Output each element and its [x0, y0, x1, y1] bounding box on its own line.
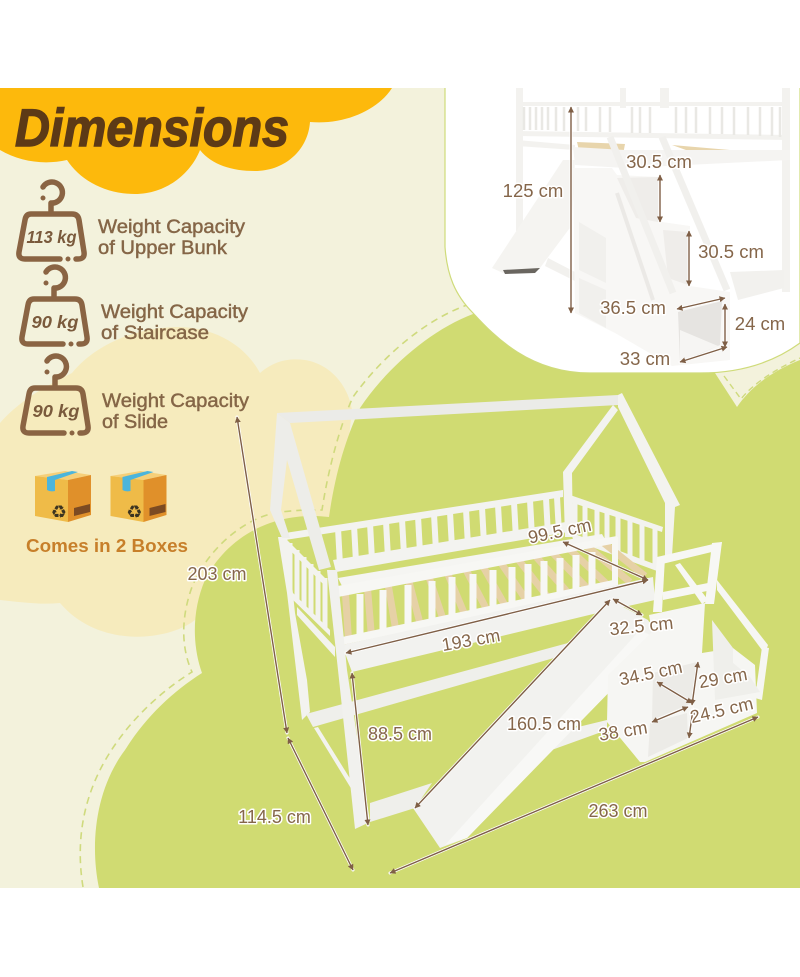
dimension labels: main bed: 88.5 cm [368, 724, 432, 744]
dimension labels: main bed: 203 cm [187, 564, 247, 584]
background: cream sliver under inset [700, 343, 800, 407]
dimension labels: inset: 30.5 cm [698, 241, 764, 262]
stair handrails [610, 137, 673, 293]
dimension labels: inset: 33 cm [620, 348, 670, 369]
dimension labels: main bed: 24.5 cm [688, 693, 755, 727]
text: weight capacity of slide: Weight Capacity [102, 391, 250, 412]
left gable [270, 413, 331, 570]
bed front beam [573, 147, 790, 168]
text: weight capacity of staircase: Weight Capacity [101, 302, 249, 323]
background: dashed stitching line [80, 305, 467, 887]
dimension labels: main bed: 29 cm [697, 664, 749, 692]
icon: 90 kg weight, slide: 90 kg [32, 401, 80, 421]
dimension labels: main bed: 32.5 cm [608, 613, 674, 639]
bed frame rails and posts [516, 88, 790, 292]
text: weight capacity of upper bunk [98, 217, 246, 259]
text: weight capacity of staircase: of Staircase [101, 323, 209, 344]
text: weight capacity of upper bunk: of Upper Bunk [98, 238, 228, 259]
front rail and balusters [332, 536, 618, 645]
dimension labels: main bed: 114.5 cm [238, 807, 311, 827]
icon: cardboard box two: ♻ [126, 502, 143, 523]
roof ridge [277, 395, 618, 423]
dimension labels: inset [503, 151, 785, 369]
icon: 90 kg weight, staircase: 90 kg [32, 312, 79, 332]
slide [492, 160, 575, 273]
background: pale yellow cloud [0, 327, 352, 637]
icon: cardboard box one: ♻ [51, 502, 67, 523]
dimension labels: inset: 125 cm [503, 180, 563, 201]
background: sliver stitching [724, 358, 800, 399]
dimension labels: main bed: 99.5 cm [526, 515, 593, 548]
icon: 113 kg weight, upper bunk [19, 182, 84, 260]
bed balusters [524, 107, 780, 137]
text: weight capacity of staircase [101, 302, 249, 344]
bed slats [577, 142, 753, 160]
background: green cloud [95, 280, 800, 888]
icon: 90 kg weight, slide [23, 356, 88, 434]
text: weight capacity of upper bunk: Weight Capacity [98, 217, 246, 238]
text: weight capacity of slide: of Slide [102, 412, 168, 433]
dimension labels: inset: 36.5 cm [600, 297, 666, 318]
dimension labels: main bed: 34.5 cm [617, 657, 684, 690]
inset panel: white staircase detail background [445, 88, 800, 373]
rear posts and left end panel [278, 537, 354, 790]
slide support [535, 720, 607, 756]
dimension labels: inset: 24 cm [735, 313, 785, 334]
rear rail with balusters [285, 490, 568, 572]
rear foot rail [306, 643, 568, 727]
stair cabinet [607, 603, 757, 762]
bottom front rail [370, 783, 432, 822]
right end gable and rail [563, 393, 680, 571]
upper handrail [653, 542, 722, 612]
title banner: yellow cloud [0, 88, 392, 194]
dimension labels: main bed: 160.5 cm [507, 714, 581, 734]
text: comes in 2 boxes: Comes in 2 Boxes [26, 535, 188, 556]
dimension arrows: main bed [237, 417, 758, 873]
front corner post [327, 570, 370, 829]
dimension labels: main bed: 193 cm [440, 625, 502, 655]
dimension labels: inset: 30.5 cm [626, 151, 692, 172]
mattress slats [345, 540, 645, 647]
icon: cardboard box two [110, 471, 166, 523]
main side beam [342, 577, 655, 672]
rear frame beam [338, 534, 606, 586]
text: weight capacity of slide [102, 391, 250, 433]
icon: cardboard box one [35, 471, 91, 523]
icon: 90 kg weight, staircase [22, 267, 87, 346]
icon: 113 kg weight, upper bunk: 113 kg [26, 227, 77, 247]
dimension labels: main bed [187, 515, 755, 827]
dimension labels: main bed: 263 cm [588, 801, 648, 821]
stair cabinet and treads [573, 168, 730, 366]
slide [413, 600, 660, 848]
dimension arrows: inset [571, 107, 727, 362]
main illustration: loft bed with slide and stairs [270, 393, 769, 848]
title: Dimensions [15, 99, 289, 158]
dimension labels: main bed: 38 cm [597, 717, 649, 745]
side stair rail [712, 580, 769, 700]
inset illustration: staircase close-up [492, 88, 790, 366]
